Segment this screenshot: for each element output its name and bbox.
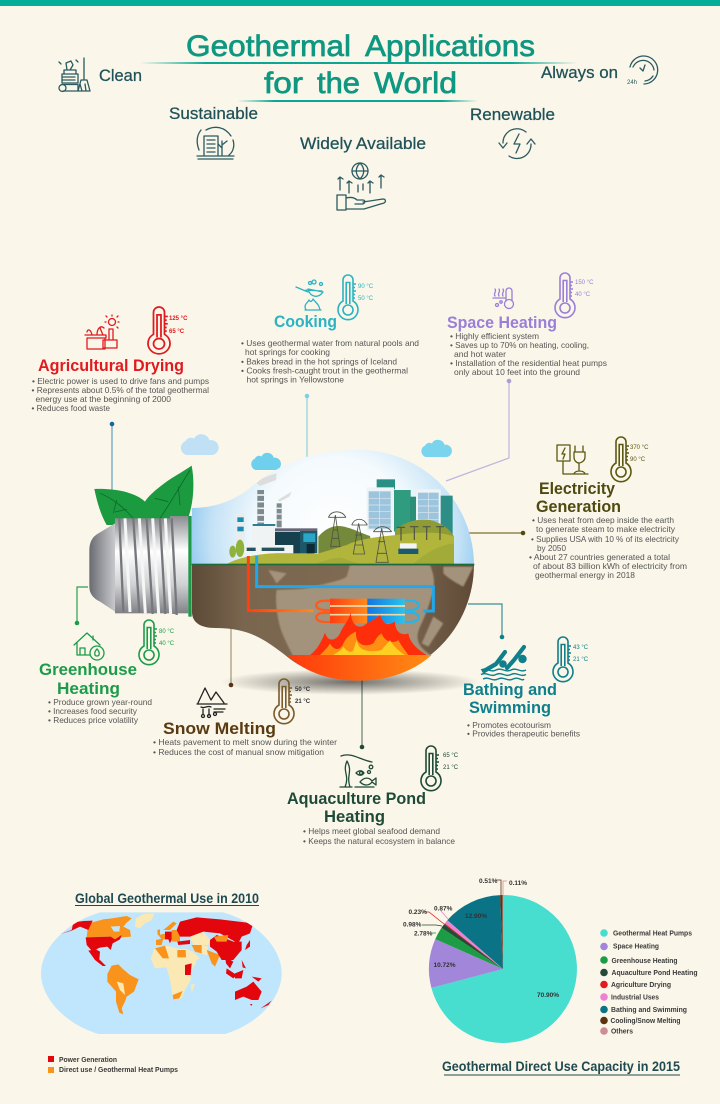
pie legend: Greenhouse Heating [612, 956, 678, 965]
pipes [248, 556, 313, 611]
section: cooking [241, 275, 419, 384]
section: space heating: Space Heating [447, 313, 557, 332]
section: snow melting: Snow Melting [163, 719, 276, 738]
section: cooking: • Uses geothermal water from natural pools and [241, 339, 419, 348]
icon: globe over hand [337, 163, 385, 210]
section: bathing and swimming [463, 637, 589, 738]
icon: house with leaf [74, 633, 104, 660]
benefit: sustainable: Sustainable [169, 105, 258, 123]
section: cooking: hot springs for cooking [245, 348, 330, 357]
section: electricity generation: of about 83 billion kWh of electricity from [533, 562, 687, 571]
red countries [59, 917, 272, 1008]
section: agricultural drying: • Represents about 0.5% of the total geothermal [32, 386, 209, 395]
pie legend [600, 928, 698, 1036]
section: space heating [447, 273, 607, 377]
pie labels: 0.51% [479, 878, 498, 885]
icon: plug and box [557, 445, 588, 474]
map legend: Direct use / Geothermal Heat Pumps [59, 1065, 178, 1074]
bulb glass and ground [190, 448, 480, 684]
heat exchanger [316, 599, 419, 623]
icon: plant pot with sun [85, 315, 119, 349]
benefit: renewable: Renewable [470, 106, 555, 124]
thermometer: 370 °C [630, 445, 649, 451]
icon: renewable energy [499, 129, 535, 159]
connector lines [77, 381, 523, 747]
thermometer: 125 °C [169, 316, 188, 322]
power scene [192, 473, 474, 681]
map legend: Power Generation [59, 1055, 117, 1064]
benefit: sustainable [169, 105, 258, 159]
pie heading: Geothermal Direct Use Capacity in 2015 [442, 1058, 680, 1074]
icon: pan with steam [296, 280, 323, 310]
pie labels: 0.23% [408, 909, 427, 916]
section: snow melting: • Reduces the cost of manual snow mitigation [153, 748, 324, 757]
thermometer [139, 620, 175, 665]
pie labels: 10.72% [434, 962, 456, 969]
title: Geothermal [186, 30, 351, 63]
clouds [181, 434, 452, 470]
flames [310, 613, 427, 655]
section: greenhouse heating: Heating [57, 679, 120, 698]
map legend [48, 1055, 178, 1074]
beige countries [135, 913, 210, 999]
benefit: renewable [470, 106, 555, 159]
thermometer [421, 746, 459, 791]
section: bathing and swimming: • Provides therapeutic benefits [467, 730, 580, 738]
section: electricity generation [529, 437, 687, 580]
benefit: clean [59, 58, 142, 92]
section: greenhouse heating [39, 620, 175, 725]
thermometer: 21 °C [443, 765, 459, 771]
ground line [192, 564, 474, 565]
thermometer [338, 275, 374, 320]
section: snow melting: • Heats pavement to melt snow during the winter [153, 738, 337, 747]
pie labels: 0.87% [434, 906, 453, 912]
title: for [264, 67, 303, 100]
section: electricity generation: Generation [536, 497, 621, 516]
thermometer: 50 °C [295, 687, 311, 693]
thermometer: 150 °C [575, 280, 594, 286]
thermometer [553, 637, 589, 682]
pie labels: 2.78% [414, 930, 433, 938]
section: agricultural drying: Agricultural Drying [38, 356, 184, 375]
section: space heating: • Saves up to 70% on heating, cooling, [450, 341, 589, 350]
world map [41, 912, 282, 1034]
section: cooking: • Bakes bread in the hot springs of Iceland [241, 358, 397, 366]
screw base [89, 516, 192, 617]
section: greenhouse heating: • Increases food security [48, 707, 138, 716]
pie labels: 0.98% [403, 922, 422, 928]
thermometer: 40 °C [575, 292, 591, 298]
mongolia [214, 935, 228, 942]
section: cooking: Cooking [274, 312, 337, 331]
towers [367, 479, 453, 536]
benefit: clean: Clean [99, 67, 142, 85]
section: space heating: and hot water [454, 350, 506, 359]
benefit: always on [541, 56, 658, 86]
icon: fish and seaweed [340, 755, 376, 787]
thermometer: 90 °C [630, 457, 646, 463]
bulb shadow [220, 669, 480, 695]
top band [0, 0, 720, 6]
pie labels: 12.90% [465, 913, 487, 920]
section: cooking: hot springs in Yellowstone [246, 376, 344, 384]
benefit: widely available [300, 135, 426, 210]
icon: 24h clock: 24h [627, 80, 637, 86]
pie legend: Aquaculture Pond Heating [612, 968, 698, 977]
section: greenhouse heating: • Produce grown year-round [48, 698, 152, 707]
pie labels [403, 878, 559, 999]
pie chart: direct use capacity [403, 878, 577, 1043]
connector dots [75, 379, 525, 749]
pie legend: Bathing and Swimming [611, 1005, 687, 1014]
thermometer: 90 °C [358, 284, 374, 290]
thermometer: 40 °C [159, 641, 175, 647]
section: aquaculture pond heating: Heating [324, 807, 385, 826]
light bulb illustration [89, 448, 480, 684]
section: greenhouse heating: Greenhouse [39, 660, 137, 679]
section: bathing and swimming: Swimming [469, 698, 551, 717]
thermometer [555, 273, 594, 318]
pie legend: Industrial Uses [611, 992, 659, 1002]
title [140, 30, 577, 102]
section: agricultural drying [32, 307, 209, 413]
beige bolivia and hudson bay [117, 982, 125, 995]
pylons [328, 512, 444, 562]
icon: cleaning tools [59, 58, 90, 92]
pie labels: 70.90% [537, 992, 559, 999]
section: electricity generation: geothermal energy in 2018 [535, 571, 635, 580]
section: bathing and swimming: Bathing and [463, 680, 557, 699]
section: cooking: • Cooks fresh-caught trout in the geothermal [241, 366, 408, 376]
title: the [317, 67, 360, 100]
benefit: always on: Always on [541, 64, 618, 82]
section: electricity generation: • About 27 countries generated a total [529, 553, 670, 562]
pie legend: Others [611, 1026, 633, 1036]
section: electricity generation: • Supplies USA with 10 % of its electricity [531, 535, 680, 544]
section: greenhouse heating: • Reduces price volatility [48, 716, 139, 725]
substation [398, 543, 418, 554]
icon: snowy mountains [197, 688, 227, 718]
pie leader lines [422, 880, 507, 933]
thermometer: 43 °C [573, 645, 589, 651]
thermometer: 65 °C [169, 329, 185, 335]
icon: swimmers [481, 647, 527, 680]
section: electricity generation: • Uses heat from deep inside the earth [532, 516, 674, 525]
pie legend: Space Heating [613, 942, 659, 950]
section: agricultural drying: • Electric power is used to drive fans and pumps [32, 377, 209, 386]
thermometer [611, 437, 649, 482]
section: agricultural drying: • Reduces food waste [32, 404, 110, 413]
thermometer: 80 °C [159, 629, 175, 635]
section: electricity generation: to generate steam to make electricity [536, 525, 676, 534]
pie legend: Cooling/Snow Melting [610, 1016, 680, 1025]
benefit: widely available: Widely Available [300, 135, 426, 153]
section: electricity generation: by 2050 [537, 544, 566, 553]
thermometer: 65 °C [443, 753, 459, 759]
section: agricultural drying: energy use at the beginning of 2000 [36, 395, 171, 404]
section: electricity generation: Electricity [539, 479, 616, 498]
section: aquaculture pond heating: • Keeps the natural ecosystem in balance [303, 837, 455, 846]
factory [229, 473, 317, 558]
hills [318, 526, 373, 555]
pie legend: Geothermal Heat Pumps [613, 928, 692, 938]
fire bowl [287, 655, 432, 681]
icon: heat and thermometer [493, 288, 514, 308]
thermometer [148, 307, 188, 354]
leaves [94, 466, 193, 525]
title: World [374, 67, 457, 100]
icon: green building [197, 127, 234, 159]
section: space heating: • Highly efficient system [450, 332, 539, 341]
section: space heating: only about 10 feet into the ground [454, 368, 580, 377]
section: aquaculture pond heating [287, 746, 459, 846]
thermometer: 21 °C [295, 699, 311, 705]
thermometer [274, 679, 311, 724]
thermometer: 21 °C [573, 657, 589, 663]
title: Applications [365, 30, 535, 63]
section: bathing and swimming: • Promotes ecotourism [467, 721, 551, 730]
thermometer: 50 °C [358, 296, 374, 302]
section: aquaculture pond heating: Aquaculture Pond [287, 789, 426, 808]
orange countries [87, 916, 220, 1014]
pie legend: Agriculture Drying [611, 980, 671, 989]
map heading: Global Geothermal Use in 2010 [75, 890, 259, 906]
section: snow melting [153, 679, 337, 757]
pie labels: 0.11% [509, 880, 527, 887]
section: aquaculture pond heating: • Helps meet global seafood demand [303, 827, 440, 836]
section: space heating: • Installation of the residential heat pumps [450, 359, 607, 368]
